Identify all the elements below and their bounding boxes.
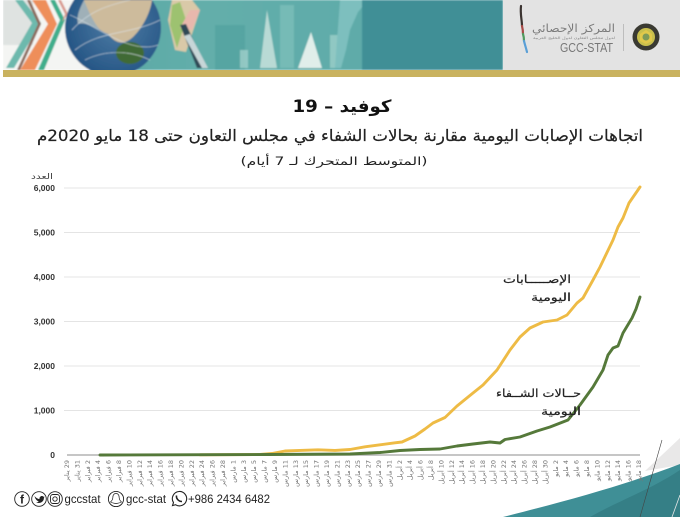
- y axis labels: 6,000: [34, 183, 55, 193]
- x axis date labels: 4 مايو: [562, 460, 570, 478]
- logo arabic name: المركز الإحصائي: [532, 22, 615, 35]
- subtitle: اتجاهات الإصابات اليومية مقارنة بحالات الشفاء في مجلس التعاون حتى 18 مايو 2020م: [37, 126, 643, 146]
- series: daily recoveries: [100, 297, 640, 455]
- city skyline: [215, 25, 245, 70]
- globe: [65, 0, 161, 76]
- emblem: [632, 24, 660, 50]
- x axis date labels: 31 يناير: [73, 460, 81, 482]
- gridlines: [64, 188, 640, 410]
- label: daily recoveries: [496, 387, 581, 418]
- x axis date labels: 11 مارس: [281, 460, 289, 487]
- x axis date labels: 2 فبراير: [84, 460, 92, 483]
- x axis date labels: 10 أبريل: [436, 460, 445, 484]
- x axis date labels: 8 أبريل: [426, 460, 435, 480]
- x axis date labels: 25 مارس: [354, 460, 362, 487]
- collage image: [3, 0, 503, 76]
- x axis date labels: 12 أبريل: [447, 460, 456, 484]
- icon: instagram: [48, 492, 62, 506]
- x axis date labels: 16 فبراير: [157, 460, 165, 487]
- x axis date labels: 6 مايو: [573, 460, 581, 478]
- x axis date labels: [63, 460, 643, 487]
- x axis date labels: 16 أبريل: [468, 460, 477, 484]
- x axis date labels: 23 مارس: [344, 460, 352, 487]
- icon: facebook: [15, 492, 29, 506]
- x axis date labels: 6 أبريل: [416, 460, 425, 480]
- label: daily recoveries: حــالات الشــفاء: [496, 387, 581, 400]
- x axis date labels: 28 فبراير: [219, 460, 227, 487]
- label: daily cases: [503, 273, 571, 304]
- y axis labels: 4,000: [34, 272, 55, 282]
- x axis date labels: 20 فبراير: [177, 460, 185, 487]
- x axis date labels: 22 فبراير: [188, 460, 196, 487]
- y axis labels: 0: [50, 450, 55, 460]
- x axis date labels: 12 مايو: [604, 460, 612, 482]
- x axis date labels: 8 مايو: [583, 460, 591, 478]
- icon: snapchat: [108, 491, 124, 507]
- handle: gcc-stat: gcc-stat: [126, 493, 167, 506]
- label: daily recoveries: اليومية: [541, 405, 581, 418]
- decorative swoosh: [503, 438, 680, 517]
- series: recoveries baseline grey: [67, 454, 640, 456]
- x axis date labels: 21 مارس: [333, 460, 341, 487]
- x axis date labels: 2 مايو: [552, 460, 560, 478]
- y axis labels: 2,000: [34, 361, 55, 371]
- x axis date labels: 14 فبراير: [146, 460, 154, 487]
- x axis date labels: 30 أبريل: [540, 460, 549, 484]
- y axis labels: 5,000: [34, 228, 55, 238]
- x axis date labels: 31 مارس: [385, 460, 393, 487]
- y axis unit: العدد: [31, 172, 53, 181]
- x axis date labels: 29 يناير: [63, 460, 71, 482]
- icon: facebook: f: [20, 492, 25, 506]
- series: daily cases: [200, 187, 640, 455]
- x axis date labels: 15 مارس: [302, 460, 310, 487]
- x axis date labels: 9 مارس: [271, 460, 279, 483]
- x axis date labels: 14 مايو: [614, 460, 622, 482]
- x axis date labels: 18 مايو: [635, 460, 643, 482]
- logo panel: [503, 0, 680, 70]
- icon: whatsapp: [172, 491, 187, 506]
- ribbon: [521, 6, 527, 52]
- x axis date labels: 18 أبريل: [478, 460, 487, 484]
- x axis date labels: 3 مارس: [240, 460, 248, 483]
- x axis date labels: 22 أبريل: [499, 460, 508, 484]
- x axis date labels: 19 مارس: [323, 460, 331, 487]
- x axis date labels: 12 فبراير: [136, 460, 144, 487]
- x axis date labels: 20 أبريل: [488, 460, 497, 484]
- y axis labels: [34, 183, 55, 460]
- header banner: [3, 0, 680, 77]
- x axis date labels: 17 مارس: [313, 460, 321, 487]
- x axis date labels: 27 مارس: [365, 460, 373, 487]
- x axis date labels: 10 فبراير: [125, 460, 133, 487]
- y axis labels: 3,000: [34, 316, 55, 326]
- ship and chevron patch: [168, 0, 200, 52]
- x axis date labels: 2 أبريل: [395, 460, 404, 480]
- y axis labels: 1,000: [34, 406, 55, 416]
- x axis date labels: 26 أبريل: [520, 460, 529, 484]
- label: daily cases: الإصـــــابات: [503, 273, 571, 286]
- x axis date labels: 4 أبريل: [405, 460, 414, 480]
- x axis date labels: 24 فبراير: [198, 460, 206, 487]
- x axis date labels: 18 فبراير: [167, 460, 175, 487]
- x axis date labels: 16 مايو: [625, 460, 633, 482]
- x axis date labels: 7 مارس: [261, 460, 269, 483]
- x axis date labels: 13 مارس: [292, 460, 300, 487]
- x axis date labels: 14 أبريل: [457, 460, 466, 484]
- x axis date labels: 5 مارس: [250, 460, 258, 483]
- x axis date labels: 24 أبريل: [509, 460, 518, 484]
- x axis date labels: 26 فبراير: [209, 460, 217, 487]
- logo name: GCC-STAT: [560, 41, 613, 55]
- note: moving average: (المتوسط المتحرك لـ 7 أيام): [240, 153, 428, 169]
- x axis date labels: 10 مايو: [593, 460, 601, 482]
- logo arabic subtitle: لدول مجلس التعاون لدول الخليج العربية: [533, 36, 615, 40]
- title: كوفيد – 19: [292, 97, 392, 117]
- gold band: [3, 70, 680, 77]
- x axis date labels: 4 فبراير: [94, 460, 102, 483]
- handle: gccstat: gccstat: [64, 493, 101, 506]
- footer social contacts: [15, 491, 270, 507]
- x axis date labels: 28 أبريل: [530, 460, 539, 484]
- x axis date labels: 29 مارس: [375, 460, 383, 487]
- x axis date labels: 1 مارس: [229, 460, 237, 483]
- x axis date labels: 8 فبراير: [115, 460, 123, 483]
- line chart: [31, 172, 643, 487]
- label: daily cases: اليومية: [531, 291, 571, 304]
- icon: twitter: [32, 492, 46, 506]
- phone number: +986 2434 6482: [188, 493, 270, 506]
- x axis date labels: 6 فبراير: [105, 460, 113, 483]
